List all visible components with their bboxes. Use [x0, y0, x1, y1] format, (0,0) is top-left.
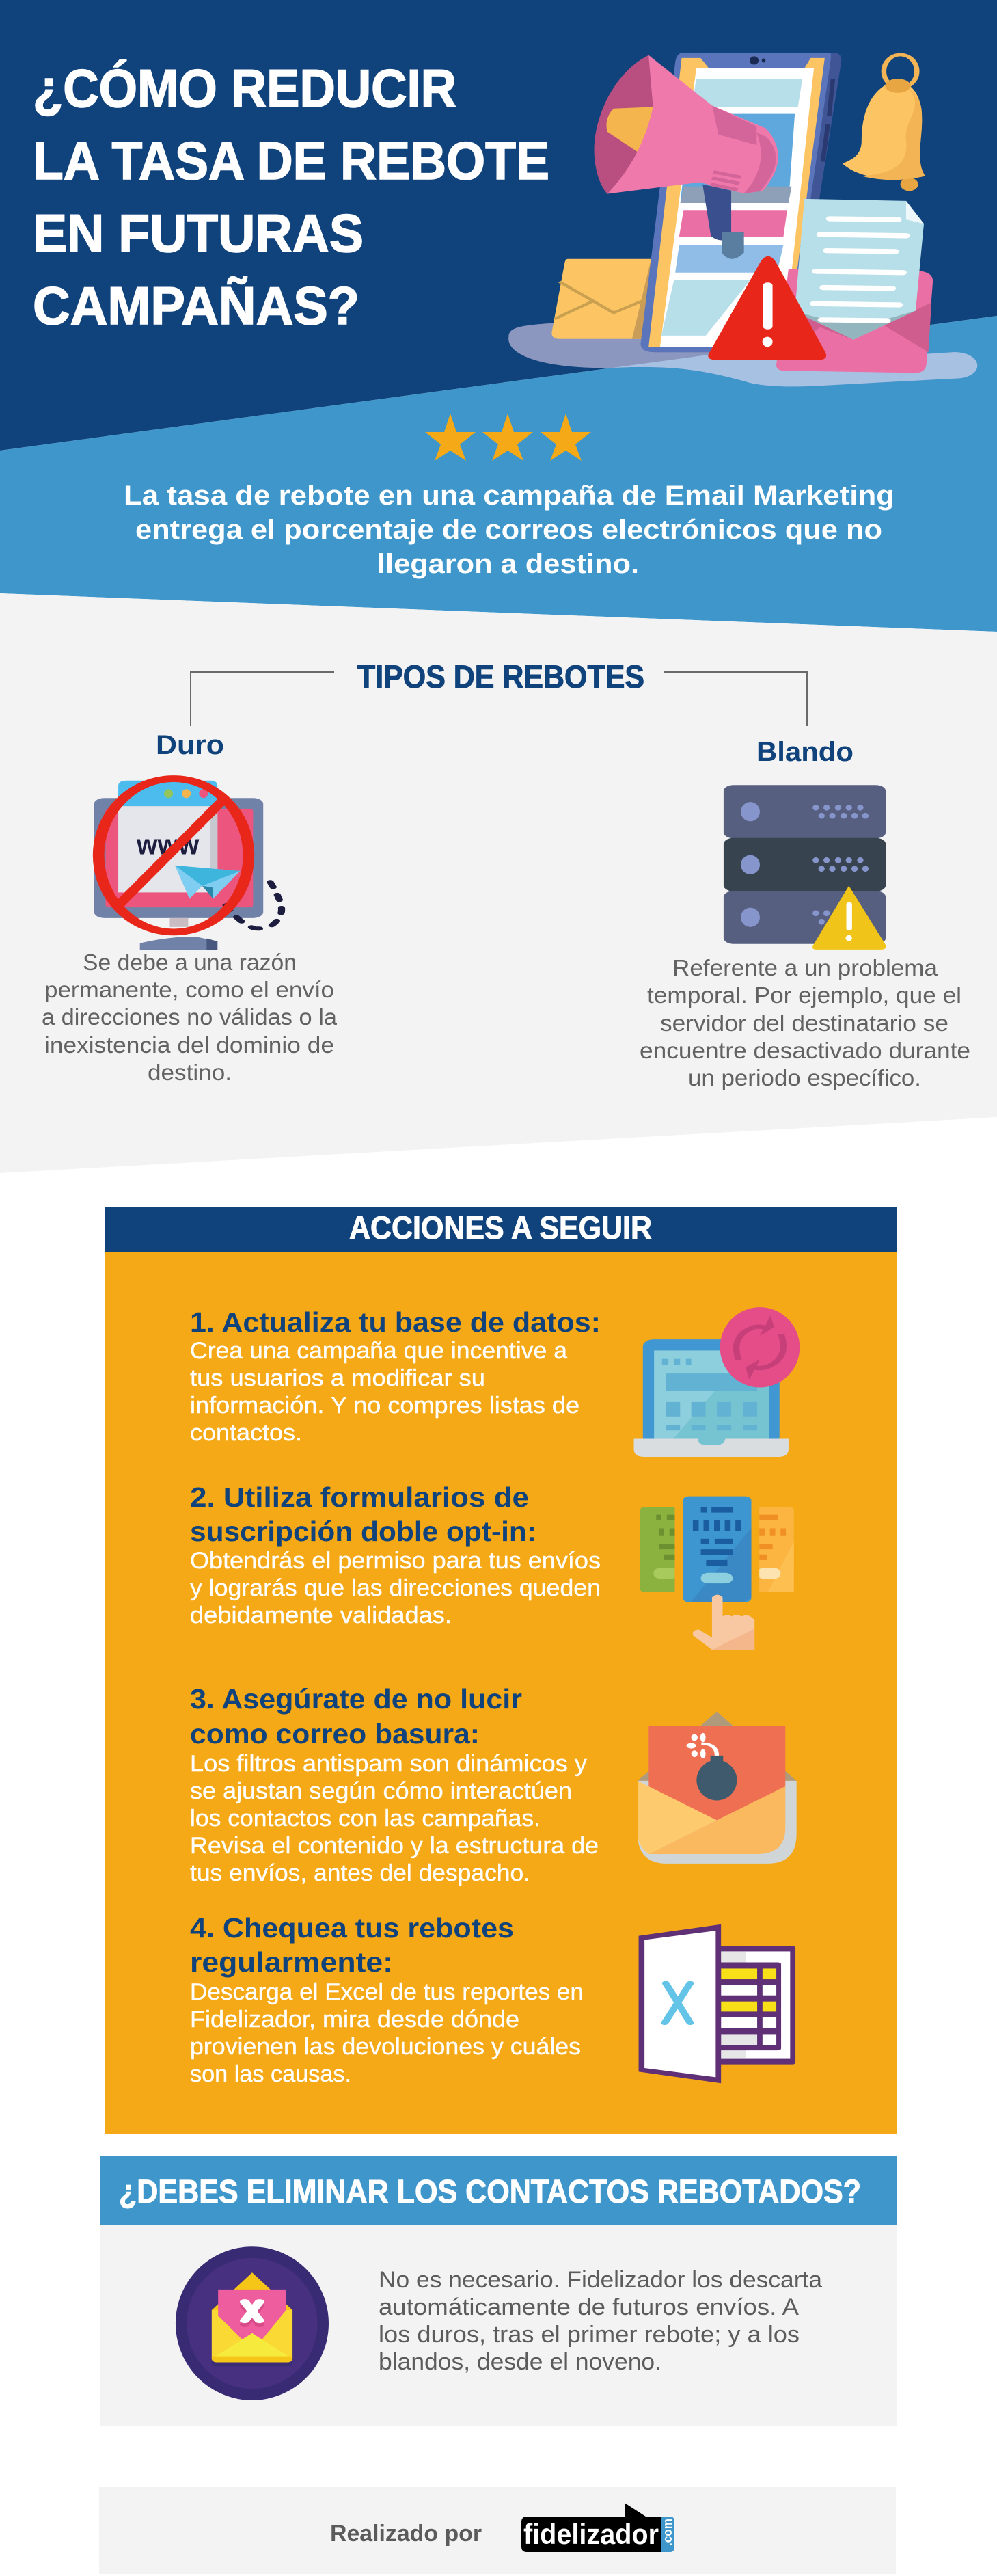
- title: ¿CÓMO REDUCIR: [33, 58, 456, 118]
- text: blando description: temporal. Por ejemplo, que el: [647, 982, 961, 1008]
- logo: fidelizador: .com: [661, 2519, 674, 2546]
- text: blando description: un periodo específico.: [688, 1065, 921, 1090]
- text: realizado por: Realizado por: [330, 2521, 482, 2547]
- panel: header background: [0, 0, 997, 451]
- icon: blocked website monitor: [94, 779, 282, 950]
- icon: forms with hand: [640, 1497, 794, 1650]
- heading: tipos de rebotes with connectors: TIPOS DE REBOTES: [357, 658, 644, 695]
- text: duro description: a direcciones no válidas o la: [42, 1004, 338, 1030]
- panel: bounce types background: [0, 593, 997, 1173]
- item 3: correo basura: Los filtros antispam son dinámicos y: [190, 1751, 587, 1777]
- text: debes eliminar answer: automáticamente de futuros envíos. A: [379, 2294, 799, 2320]
- icon: three stars: [425, 414, 591, 461]
- shadow blob: [508, 323, 977, 387]
- title: LA TASA DE REBOTE: [33, 131, 549, 191]
- logo: fidelizador: fidelizador: [523, 2518, 659, 2550]
- text: duro description: inexistencia del dominio de: [44, 1032, 334, 1058]
- item 3: correo basura: tus envíos, antes del despacho.: [190, 1860, 530, 1886]
- icon: warning triangle: [708, 256, 826, 360]
- text: debes eliminar answer: blandos, desde el noveno.: [379, 2349, 661, 2375]
- item 4: chequea: 4. Chequea tus rebotes: [190, 1912, 514, 1944]
- text: debes eliminar answer: No es necesario. Fidelizador los descarta: [379, 2267, 822, 2293]
- intro text: entrega el porcentaje de correos electrónicos que no: [135, 515, 882, 545]
- pink envelope with letter: [776, 199, 933, 373]
- item 3: correo basura: [190, 1683, 599, 1886]
- illustration: phone with megaphone, bell and envelopes: [508, 53, 977, 386]
- item 3: correo basura: los contactos con las campañas.: [190, 1806, 541, 1832]
- heading: blando: Blando: [756, 737, 853, 767]
- heading: tipos de rebotes with connectors: [191, 658, 807, 726]
- intro text: [124, 481, 894, 579]
- item 3: correo basura: Revisa el contenido y la estructura de: [190, 1833, 599, 1859]
- item 2: formularios: 2. Utiliza formularios de: [190, 1481, 529, 1513]
- item 1: actualiza: 1. Actualiza tu base de datos:: [190, 1306, 601, 1338]
- heading: acciones a seguir: ACCIONES A SEGUIR: [349, 1209, 652, 1246]
- text: duro description: Se debe a una razón: [83, 950, 297, 975]
- icon: blocked website monitor: www: [136, 829, 200, 861]
- text: debes eliminar answer: los duros, tras el primer rebote; y a los: [379, 2322, 800, 2348]
- text: blando description: [640, 955, 970, 1090]
- panel: acciones a seguir body: [105, 1252, 897, 2134]
- item 3: correo basura: 3. Asegúrate de no lucir: [190, 1683, 522, 1715]
- icon: envelope with x: [176, 2246, 329, 2400]
- item 2: formularios: Obtendrás el permiso para tus envíos: [190, 1548, 601, 1574]
- logo: fidelizador: [521, 2503, 674, 2552]
- item 2: formularios: debidamente validadas.: [190, 1602, 452, 1628]
- intro text: La tasa de rebote en una campaña de Email Marketing: [124, 481, 894, 511]
- item 4: chequea: son las causas.: [190, 2061, 351, 2087]
- text: duro description: permanente, como el envío: [44, 977, 334, 1002]
- item 1: actualiza: Crea una campaña que incentive a: [190, 1338, 567, 1364]
- text: blando description: encuentre desactivado durante: [640, 1038, 970, 1063]
- title: [33, 58, 549, 336]
- text: blando description: Referente a un problema: [672, 955, 938, 980]
- heading: acciones a seguir: [105, 1207, 897, 1252]
- item 4: chequea: Descarga el Excel de tus reportes en: [190, 1979, 584, 2005]
- title: CAMPAÑAS?: [33, 276, 359, 336]
- panel: debes eliminar body: [100, 2225, 897, 2426]
- item 1: actualiza: tus usuarios a modificar su: [190, 1365, 485, 1391]
- icon: server with warning: [724, 785, 886, 950]
- text: blando description: servidor del destinatario se: [660, 1010, 948, 1036]
- text: duro description: [42, 950, 338, 1085]
- heading: debes eliminar: ¿DEBES ELIMINAR LOS CONTACTOS REBOTADOS?: [119, 2174, 861, 2210]
- item 2: formularios: suscripción doble opt-in:: [190, 1516, 536, 1547]
- panel: footer: [99, 2487, 896, 2574]
- intro text: llegaron a destino.: [377, 549, 639, 579]
- item 1: actualiza: información. Y no compres listas de: [190, 1393, 579, 1419]
- item 1: actualiza: [190, 1306, 601, 1446]
- item 1: actualiza: contactos.: [190, 1420, 302, 1446]
- text: debes eliminar answer: [379, 2267, 822, 2375]
- item 3: correo basura: se ajustan según cómo interactúen: [190, 1778, 572, 1804]
- phone: [641, 53, 841, 352]
- megaphone: [595, 55, 778, 259]
- item 4: chequea: regularmente:: [190, 1946, 393, 1978]
- text: duro description: destino.: [148, 1060, 232, 1085]
- icon: envelope with bomb: [638, 1712, 797, 1864]
- item 2: formularios: [190, 1481, 601, 1628]
- title: EN FUTURAS: [33, 203, 364, 263]
- panel: intro band: [0, 316, 997, 632]
- item 4: chequea: Fidelizador, mira desde dónde: [190, 2007, 519, 2032]
- item 4: chequea: provienen las devoluciones y cuáles: [190, 2034, 581, 2060]
- item 4: chequea: [190, 1912, 584, 2087]
- heading: duro: Duro: [156, 730, 224, 760]
- item 3: correo basura: como correo basura:: [190, 1718, 480, 1749]
- icon: excel file: [639, 1924, 795, 2083]
- yellow envelope: [551, 259, 661, 339]
- item 2: formularios: y lograrás que las direcciones queden: [190, 1575, 601, 1601]
- heading: debes eliminar: [100, 2156, 897, 2225]
- bell: [843, 55, 925, 191]
- icon: laptop with refresh: [634, 1307, 800, 1457]
